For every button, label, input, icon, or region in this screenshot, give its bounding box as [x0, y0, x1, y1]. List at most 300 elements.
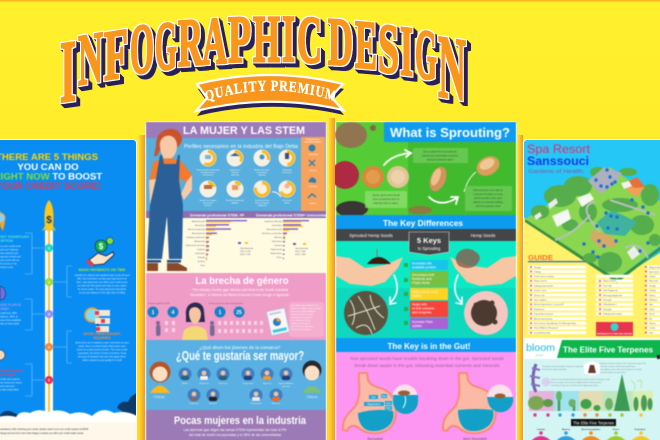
photos — [344, 291, 508, 335]
donut captions: informáticas — [203, 174, 213, 176]
list: keys: available protein — [412, 266, 436, 270]
plants — [528, 364, 652, 411]
step: make payments on time: bills. Set reminders so that each payment is on — [77, 278, 127, 280]
donut captions: Visualización de — [255, 200, 270, 202]
dirt and seeds — [367, 249, 480, 268]
step: make payments on time: as much as 100 points and stay on your report — [77, 284, 127, 288]
donut captions: Ingeniería y — [230, 170, 240, 172]
stomach: sprouted: Magnesium — [367, 402, 381, 406]
guide list: Doctor's room — [534, 289, 547, 292]
guide list: Guide — [649, 309, 655, 311]
panel: what is sprouting — [331, 121, 517, 440]
donut captions: Gestión de equipos — [199, 199, 217, 202]
clouds — [0, 393, 137, 440]
heading: spa resort: Gardens of Health — [528, 169, 583, 175]
chart: universidad: Ingeniería industrial — [265, 220, 283, 223]
donut captions: datos — [285, 202, 289, 204]
section: brecha de genero: En los puestos de dirección ingeniería — [209, 302, 244, 305]
rocket timeline: 2 — [48, 280, 50, 284]
title: infographic design: G — [415, 14, 437, 96]
chart: fp — [186, 220, 254, 267]
icon: hand and coin — [86, 238, 114, 267]
text box: seeds: Seeds, grains and nuts all — [372, 194, 400, 197]
title: infographic design — [60, 2, 466, 122]
avatar captions: Empleada — [189, 403, 199, 405]
list: keys: Phytic Acids — [412, 281, 430, 285]
heading: five things — [0, 152, 102, 192]
footer note: hange and we'd be more than happy to assist you with your credit repair needs. — [0, 432, 84, 435]
buildings — [534, 167, 645, 260]
panel: la mujer y las stem — [145, 121, 327, 440]
section: key is in the gut: Non sprouted seeds have trouble breaking down in the gut. Sprouted seeds — [350, 356, 505, 361]
chart: universidad: Física — [277, 257, 283, 259]
list: keys: Increases the — [412, 262, 432, 266]
chart: fp: Energía — [198, 257, 206, 259]
step: make payments on time: so you are always on the right side of billing — [79, 292, 126, 294]
sidebar: perfiles: Capacidad — [308, 154, 318, 156]
chart: universidad: Química — [275, 245, 283, 247]
left column steps: payment levels and — [0, 256, 21, 258]
guide list: Hi-angolo — [603, 309, 612, 311]
donut captions: software — [231, 171, 240, 174]
donut captions: técnicos — [204, 204, 212, 207]
left column steps: and read your — [0, 385, 15, 388]
left column steps: on your credit score — [0, 245, 22, 248]
section: key differences: The Key Differences — [383, 219, 464, 228]
section: brecha de genero: 1 — [219, 310, 222, 316]
step: avoid unnecessary inquiries: the type of behavior low and only apply when — [78, 356, 127, 358]
intro text: Terpenes are the aromatic oils in hemp that give it its — [599, 362, 646, 365]
step: avoid unnecessary inquiries: Every time one is asked to open new lines on your — [75, 342, 129, 344]
chart: fp: Mantenimiento — [192, 232, 206, 235]
heading: spa resort — [527, 144, 591, 175]
intro text: boost the hemp oil experience. — [599, 371, 627, 374]
icon: magnifier and reports — [85, 308, 110, 332]
chart: universidad: Eléctrica — [274, 236, 283, 239]
guide list: Garage — [534, 267, 542, 269]
heading: What is Sprouting? — [390, 126, 510, 140]
text box: harvesting: Harvesting the seed right as — [473, 189, 504, 192]
donut captions: inteligente — [257, 204, 267, 207]
text box: harvesting — [465, 186, 512, 211]
guide list: Bar & Terrace Stay Activity, The Massage Salon — [534, 322, 576, 325]
left column steps: balance, 30%, or — [0, 316, 18, 318]
stomach: sprouted — [343, 373, 418, 440]
callout: salario. El informe señala — [291, 313, 314, 316]
terpene labels: Myrcene — [562, 429, 571, 431]
callout: red box — [596, 322, 633, 336]
title: infographic design: R — [178, 3, 203, 81]
left column steps: ASK PLAN B — [0, 303, 21, 307]
text box: seeds: help them last in nature. — [373, 202, 399, 205]
step: avoid unnecessary inquiries: AVOID UNNECESSARY — [83, 332, 121, 336]
chart: fp: Logística — [197, 248, 206, 251]
ribbon: quality premium: QUALITY PREMIUM — [205, 80, 337, 102]
section: jovenes: ¿Qué dicen los jóvenes de la comarca? — [200, 345, 281, 350]
section: brecha de genero: Puestos ingenieros TFG — [148, 302, 170, 305]
chart: fp: Electrónica — [195, 224, 206, 227]
left column steps: GET SIGNIFICANT — [0, 235, 31, 239]
left column steps: lower than available — [0, 319, 22, 322]
avatar captions: industrial — [282, 385, 291, 388]
donut captions: Programación y desarrollo — [196, 170, 221, 172]
guide list: Wing of rooms — [534, 281, 547, 283]
title: infographic design: I — [400, 11, 413, 92]
guide list: Casino — [649, 328, 656, 330]
title: infographic design: H — [253, 2, 280, 76]
section: brecha de genero: 25 — [236, 310, 242, 316]
guide list: Fresh house reception — [534, 275, 554, 278]
guide list: Mineral water pickup — [534, 317, 553, 320]
key: 5 keys to sprouting: 5 Keys — [417, 236, 441, 245]
left column steps: has reached your — [0, 252, 19, 255]
illustration: girl: Chicas — [154, 395, 165, 399]
illustration: thinking woman — [182, 303, 208, 340]
step: make payments on time: Literally the easiest and quickest way to pay off your — [74, 274, 130, 277]
stomach: sprouted: Iron — [386, 401, 391, 405]
illustration: boy: Chicos — [306, 395, 318, 399]
chart: universidad: 2020: 1.365 — [295, 254, 306, 256]
intro text: Science has determined that hemp contains 100's of terpenes and — [551, 378, 610, 381]
section: bloom terpenes — [523, 338, 660, 440]
text box: harvesting: it sprouts will allow us to get — [473, 193, 503, 196]
roads — [555, 200, 655, 258]
callout — [289, 302, 324, 337]
title: infographic design: O — [130, 8, 154, 90]
guide list: Spa reception — [534, 298, 546, 302]
chart: fp: Química — [198, 261, 206, 263]
left column steps: OPTION — [0, 239, 14, 243]
section: sprouting intro — [331, 122, 516, 217]
heading: spa resort: Sanssouci — [527, 156, 589, 168]
terpene labels: Terpinolene — [634, 429, 646, 431]
list: keys — [404, 260, 448, 329]
donut captions: datos y negocio — [255, 202, 270, 204]
donut captions: Ciencia de — [282, 200, 293, 202]
guide list: Bar — [649, 318, 652, 320]
text box: soaked: natural cycle and begins to sprout, — [422, 154, 459, 158]
title: infographic design: I — [60, 22, 76, 122]
avatar captions: Empresario — [243, 383, 254, 385]
left column steps: your score will not — [0, 259, 19, 262]
seeds — [428, 156, 500, 193]
section: brecha de genero: 4 — [172, 310, 175, 316]
guide list: Rooms — [649, 295, 655, 297]
section: jovenes — [146, 340, 326, 410]
title: infographic design: D — [328, 3, 353, 80]
guide list: Day-family restaurant — [534, 313, 553, 316]
section: header: LA MUJER Y LAS STEM — [183, 125, 305, 137]
chart: universidad: Electrónica — [272, 240, 283, 243]
donut charts — [200, 150, 296, 198]
terpene labels: Pinene — [613, 429, 620, 431]
guide list: Rescue unit — [534, 294, 545, 297]
chart: universidad: Organización — [270, 249, 282, 251]
seed piles — [331, 122, 432, 217]
rocket timeline: 3 — [48, 312, 50, 316]
donut captions: informática — [282, 171, 293, 174]
left column steps: are during the report — [0, 382, 22, 384]
intro text — [542, 362, 646, 387]
avatar captions: Profesora — [219, 383, 228, 385]
chart: fp: Automoción — [194, 240, 205, 243]
donut captions: Diseño de productos — [226, 199, 244, 202]
sidebar: perfiles: más demandadas — [305, 142, 322, 144]
illustration: woman in overalls — [147, 129, 192, 271]
chart: fp: Otros — [200, 264, 205, 267]
left column steps: rate of most cards — [0, 322, 20, 326]
banner — [557, 340, 660, 358]
rocket timeline: 5 — [48, 378, 50, 382]
stomach: sprouted: Iron — [371, 395, 376, 399]
donut captions: y estadística — [256, 171, 268, 174]
footer note — [0, 428, 88, 435]
section: brecha de genero — [146, 273, 326, 340]
title: infographic design: I — [282, 2, 295, 76]
list: keys: and enzymes — [412, 310, 432, 314]
list: keys: uptake — [412, 324, 422, 328]
section: header — [146, 122, 326, 138]
icon: report — [267, 308, 289, 335]
rocket timeline: 4 — [48, 345, 50, 349]
guide list: Chapel — [649, 276, 656, 278]
terpene labels: Linalool — [537, 429, 545, 431]
section: key differences: Hemp Seeds — [471, 233, 495, 238]
title: infographic design: G — [155, 6, 177, 85]
sidebar: perfiles: Competencias — [306, 138, 321, 141]
text box: seeds: have a protective layer to — [373, 198, 400, 201]
dots — [533, 413, 643, 417]
list: keys: Helps break down — [412, 290, 439, 294]
banner: The Elite Five Terpenes — [563, 344, 653, 354]
list: keys: Decreases Anti — [412, 273, 434, 277]
guide list: Underground corridor — [534, 285, 553, 287]
panel: credit score — [0, 139, 137, 440]
label: elite five: The Elite Five Terpenes — [573, 420, 614, 425]
guide list: Tennis — [649, 314, 655, 316]
section: key is in the gut — [336, 338, 516, 440]
step: avoid unnecessary inquiries: credit, there is a hard inquiry that lowers your — [78, 345, 126, 348]
left column steps: SUBSTANTIAL — [0, 369, 24, 373]
illustration: girl — [150, 362, 170, 399]
chart: universidad: Matemáticas — [271, 252, 282, 255]
intro text: and wide of terpenes and their best high-grade hemp. — [551, 384, 599, 387]
title: infographic design: F — [104, 14, 128, 96]
curved arrows — [390, 275, 462, 304]
donut captions: y proyectos — [203, 202, 213, 204]
guide list: Shower — [649, 323, 656, 325]
avatar captions: Directora — [209, 402, 218, 405]
rocket timeline: 1 — [48, 246, 50, 250]
left column steps: and your balance — [0, 248, 19, 252]
step: avoid unnecessary inquiries: INQUIRIES — [93, 336, 111, 340]
donut captions: aplicada — [258, 174, 267, 176]
intro text: of these five prime terpenes — [542, 368, 567, 371]
key: 5 keys to sprouting — [409, 232, 449, 255]
guide list: Medical department, X-ray and PI — [534, 303, 564, 306]
stomach: non sprouted — [443, 373, 513, 440]
guide list: Gym — [649, 304, 654, 306]
guide list: Boy rooms — [649, 281, 659, 283]
guide list: Spa Centre — [649, 270, 660, 273]
sidebar: perfiles: Liderazgo — [309, 186, 318, 188]
guide list: Massage playground — [603, 295, 622, 297]
guide list: Garage — [649, 285, 657, 287]
step: avoid unnecessary inquiries: requested, the worse it looks to lenders. Keep — [78, 352, 127, 355]
section: brecha de genero: La brecha de género — [196, 276, 288, 287]
title: infographic design: P — [228, 2, 251, 77]
icon: vial — [584, 361, 600, 376]
guide heading: GUIDE — [528, 255, 553, 262]
guide heading — [528, 255, 586, 262]
map markers — [582, 168, 650, 259]
step: avoid unnecessary inquiries — [75, 332, 129, 362]
text box: soaked: losing its protective layer — [427, 158, 453, 162]
list: keys: of Anti-oxidants — [412, 306, 435, 310]
section: brecha de genero: 1 — [152, 310, 155, 316]
section: demanda bar: Demanda profesional STEM- FP — [190, 213, 245, 217]
step: make payments on time — [74, 268, 130, 294]
section: brecha de genero: Revolution”, el informe del World Economic Forum recoge lo siguiente: — [190, 293, 290, 297]
heading: five things: YOU CAN DO — [17, 162, 79, 173]
callout: red box: ENTRANCE TO THE SPA CENTRE — [597, 332, 633, 336]
title: infographic design: C — [297, 3, 322, 77]
icon: hand and coin: $ — [99, 242, 104, 251]
section: key differences — [336, 215, 516, 338]
step: avoid unnecessary inquiries: really needed so you qualify for credit — [82, 359, 122, 362]
chart: universidad: 2019: 1.802 — [295, 251, 306, 253]
text box: soaked: Once soaked the seed starts its — [423, 150, 458, 154]
footer note: assistance with restoring your credit, please reach out to our credit experts at WCM — [0, 428, 88, 431]
key: 5 keys to sprouting: to Sprouting — [418, 246, 441, 251]
chart: universidad: Informática — [272, 224, 283, 227]
logo: bloom: bloom — [526, 342, 555, 354]
callout: robótica, por lo que se — [291, 322, 312, 325]
callout: pide reforzar la formación — [291, 326, 314, 328]
text box: harvesting: all the benefits of the seed — [474, 197, 503, 200]
section: pocas mujeres — [146, 410, 326, 440]
icons: people — [156, 321, 263, 336]
donut captions — [196, 168, 293, 207]
stomach: sprouted: B12 — [386, 406, 391, 410]
guide list: Pool Club — [603, 285, 613, 287]
step: make payments on time: MAKE PAYMENTS ON TIME — [79, 268, 126, 272]
intro text: The power hemp provides, known as terpenes, — [542, 365, 584, 368]
section: key is in the gut: break down easier in the gut, releasing essential nutrients and minerals — [355, 363, 500, 368]
section: perfiles — [146, 137, 326, 211]
left column steps: long on your — [0, 266, 13, 269]
intro text: there are only a few that are highly found in full-spectrum — [551, 381, 602, 384]
left column steps: OF THEM — [0, 373, 15, 377]
terpene labels: Beta Caryophyllene — [582, 428, 601, 431]
callout: Las mujeres que trabajan en el — [291, 304, 319, 307]
text box: harvesting: with the protective shell — [476, 205, 501, 208]
intro text: Their ability is pure and some terpenes can help — [599, 368, 642, 371]
chart: universidad: Telecomunicación — [266, 229, 282, 231]
sidebar: perfiles: Técnicas — [309, 170, 317, 172]
avatar captions: Ingeniero/Médico — [278, 383, 295, 385]
callout: técnica de las mujeres. — [291, 328, 312, 331]
terpene icons — [530, 431, 652, 440]
title: infographic design: A — [202, 3, 227, 79]
chart: universidad — [262, 220, 309, 259]
guide list: Underground corridor — [603, 314, 622, 316]
left column steps: DEBT — [0, 307, 10, 311]
guide list: Rehabilitation 2 — [603, 303, 618, 306]
section: pocas mujeres: Las alumnas que eligen las ramas STEM representan tan solo el 9% — [183, 428, 287, 432]
section: demanda bar: Demanda profesional STEM+ Universidad — [256, 213, 327, 217]
text box: soaked — [413, 148, 468, 163]
guide list: Kids Playground — [603, 290, 618, 292]
section: perfiles: Perfiles necesarios en la industria del Bajo Deba — [184, 144, 298, 150]
section: demanda bar — [146, 211, 327, 218]
donut captions: Análisis de datos — [254, 168, 270, 172]
panel: spa resort — [523, 139, 660, 440]
list: keys: Gluten — [412, 294, 422, 298]
callout: que la brecha se agrava — [291, 317, 313, 319]
avatar captions: Médica — [182, 383, 189, 385]
guide list: Hi-angolo — [603, 300, 612, 302]
guide list: Wellness — [649, 300, 657, 302]
avatar captions: Mecánico — [272, 403, 281, 405]
section: pocas mujeres: del total de recién incorporadas y el 35% de las universitarias — [189, 433, 281, 437]
title: infographic design: E — [355, 5, 377, 84]
chart: universidad: Total demanda — [295, 247, 309, 250]
text box: harvesting: without our stomach battling — [473, 201, 504, 204]
list: keys: Helps with — [412, 302, 427, 306]
brackets — [25, 233, 72, 396]
stomach: sprouted: Zinc — [382, 394, 387, 398]
step: avoid unnecessary inquiries: score for a short period of time. The more credit — [77, 348, 128, 352]
guide list: Wing of rooms — [603, 281, 616, 283]
avatars — [178, 368, 292, 402]
step: make payments on time: for seven years. Try auto payments and alerts — [78, 288, 127, 291]
avatar captions: Ingeniero — [263, 383, 272, 385]
title: infographic design: S — [378, 9, 399, 89]
chart: fp: Informática — [195, 252, 206, 255]
intro text: distinctive scents, and the beautiful flavor. — [599, 365, 636, 368]
hands — [336, 256, 516, 286]
terpene labels — [537, 428, 646, 431]
donut captions: industrial — [231, 174, 240, 176]
sidebar: perfiles: Análisis — [310, 202, 316, 205]
guide list: Grand Relaxa Hot — [534, 331, 550, 334]
left column steps: credit responsibly — [0, 388, 19, 392]
chart: fp: Administración — [192, 220, 205, 223]
guide list: Parking — [649, 290, 656, 292]
left column steps — [0, 210, 31, 392]
guide list — [528, 266, 660, 334]
chart: fp: Mecánica industrial — [188, 228, 206, 231]
chart: fp: 2019: 3.245 — [240, 251, 251, 253]
guide list: Hairdresser — [534, 309, 545, 311]
list: keys: Nutrients and — [412, 277, 432, 281]
plant strip — [528, 364, 653, 417]
guide list: Pool — [649, 332, 654, 334]
avatar captions: Construcción — [250, 402, 262, 405]
section: jovenes: ¿Qué te gustaría ser mayor? — [176, 349, 304, 363]
isometric map — [525, 167, 660, 283]
rocket timeline: $ — [46, 215, 52, 226]
illustration: boy — [302, 360, 322, 399]
avatar captions — [182, 383, 295, 405]
chart: fp: 2020: 1.902 — [240, 254, 251, 256]
chart: universidad: Mecánica y materiales — [262, 232, 282, 235]
avatar captions: Enfermera — [199, 383, 210, 385]
label: elite five — [571, 419, 616, 426]
donut captions: Seguridad — [282, 170, 292, 172]
sidebar: perfiles — [301, 137, 325, 211]
